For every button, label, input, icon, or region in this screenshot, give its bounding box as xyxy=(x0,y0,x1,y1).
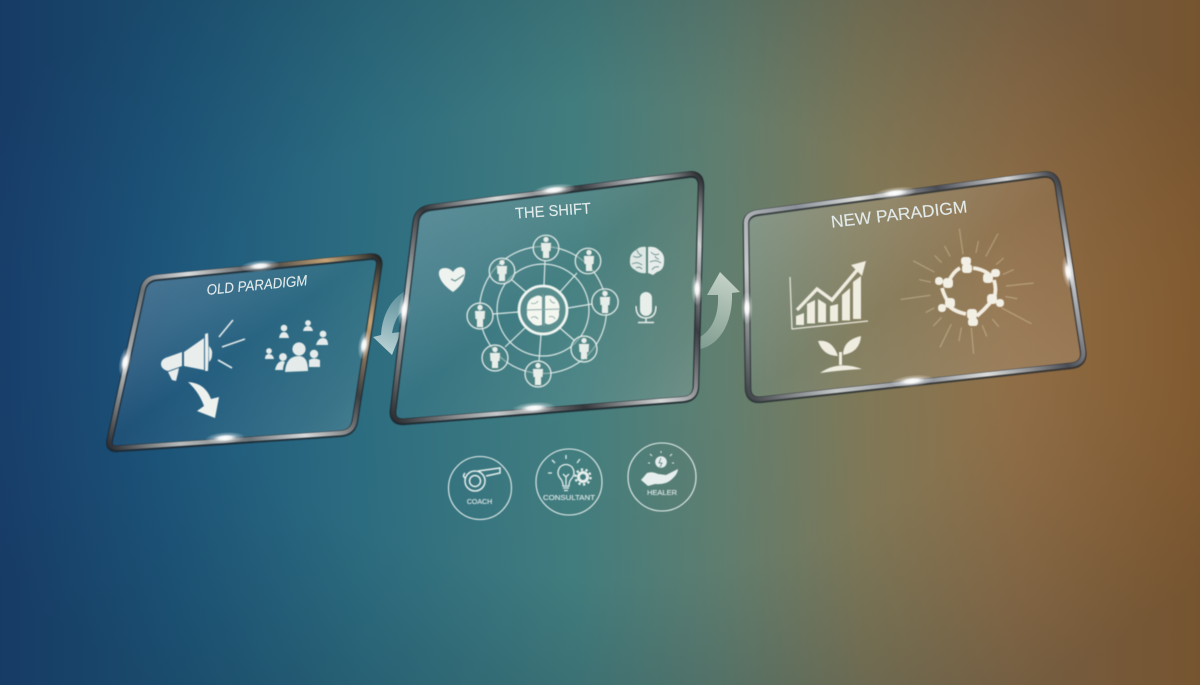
network rings and spokes xyxy=(480,246,606,374)
panel: the shift xyxy=(393,174,703,422)
icon: circle of people with rays xyxy=(901,229,1034,354)
icon: brain xyxy=(630,247,664,275)
central brain node xyxy=(519,286,567,334)
label: consultant: CONSULTANT xyxy=(543,493,595,502)
badge: healer xyxy=(628,443,696,511)
heading: old paradigm: OLD PARADIGM xyxy=(206,273,309,299)
icon: light bulb xyxy=(548,455,580,490)
icon: sprout xyxy=(818,336,862,373)
frame highlights: old paradigm xyxy=(116,258,372,445)
heading: the shift: THE SHIFT xyxy=(515,200,592,223)
panel: new paradigm xyxy=(741,174,1083,400)
panel: old paradigm xyxy=(109,256,379,449)
frame highlights: the shift xyxy=(396,181,703,416)
icon: heart with check xyxy=(439,267,465,292)
frame highlights: new paradigm xyxy=(741,184,1076,389)
icon: growth chart xyxy=(790,261,868,329)
heading: new paradigm: NEW PARADIGM xyxy=(830,197,968,232)
network diagram xyxy=(467,235,618,387)
person nodes xyxy=(467,235,618,387)
badge: coach xyxy=(448,456,512,520)
arrow: from the shift to new paradigm xyxy=(700,272,740,349)
label: healer: HEALER xyxy=(647,488,678,497)
icon: whistle xyxy=(464,468,500,491)
icon: megaphone xyxy=(161,320,245,381)
icon: microphone xyxy=(636,292,656,322)
badge: consultant xyxy=(536,449,602,515)
icon: hand holding coin xyxy=(641,451,678,486)
icon: gear xyxy=(576,470,590,484)
person figures xyxy=(475,237,610,385)
icon: downward curved arrow xyxy=(188,382,219,418)
arrow: from the shift back to old paradigm xyxy=(373,292,404,355)
label: coach: COACH xyxy=(467,499,492,506)
icon: audience group xyxy=(265,320,328,372)
radiating rays xyxy=(901,229,1034,354)
ring of people xyxy=(942,268,996,316)
